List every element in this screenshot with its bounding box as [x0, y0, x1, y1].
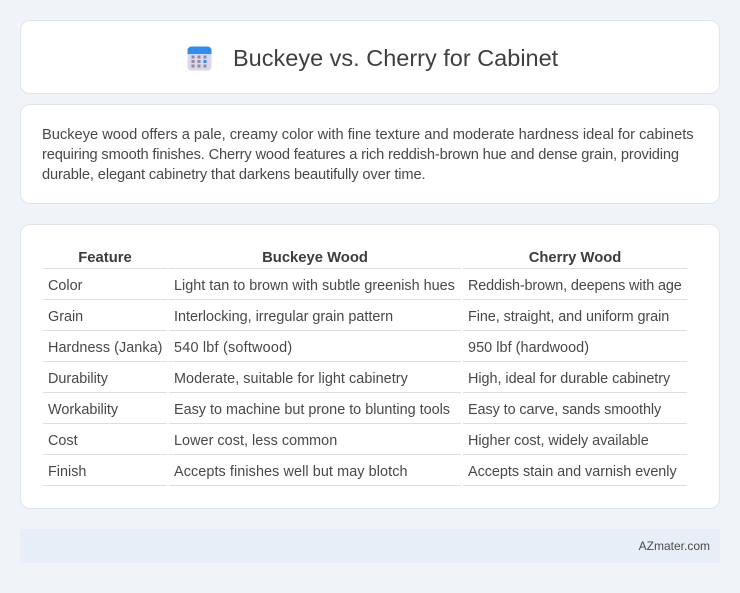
table header: Feature [78, 250, 132, 266]
row: finish: Accepts stain and varnish evenly [468, 464, 677, 480]
title: Buckeye vs. Cherry for Cabinet [233, 45, 558, 71]
row: color: Light tan to brown with subtle greenish hues [174, 278, 455, 294]
summary paragraph: Buckeye wood offers a pale, creamy color with fine texture and moderate hardness ideal for cabinets [42, 127, 694, 143]
row: hardness [43, 340, 687, 362]
row: finish: Accepts finishes well but may blotch [174, 464, 408, 480]
row: hardness: 540 lbf (softwood) [174, 340, 292, 356]
row: color [43, 278, 687, 300]
footer brand: AZmater.com [639, 539, 710, 553]
comparison table [43, 250, 687, 486]
table header: Cherry Wood [529, 250, 621, 266]
row: grain [43, 309, 687, 331]
row: finish [43, 464, 687, 486]
row: color: Color [48, 278, 82, 294]
panel: title card [20, 20, 720, 94]
summary paragraph: requiring smooth finishes. Cherry wood features a rich reddish-brown hue and dense grain, providing [42, 147, 679, 163]
row: durability: Durability [48, 371, 108, 387]
row: workability: Easy to machine but prone to blunting tools [174, 402, 450, 418]
summary paragraph [42, 127, 694, 183]
row: grain: Fine, straight, and uniform grain [468, 309, 669, 325]
table header [43, 250, 687, 269]
footer bar [20, 529, 720, 563]
summary paragraph: durable, elegant cabinetry that darkens beautifully over time. [42, 167, 425, 183]
table header: Buckeye Wood [262, 250, 368, 266]
row: hardness: Hardness (Janka) [48, 340, 163, 356]
row: durability: High, ideal for durable cabinetry [468, 371, 670, 387]
row: grain: Grain [48, 309, 83, 325]
row: workability: Workability [48, 402, 118, 418]
row: cost: Cost [48, 433, 78, 449]
row: durability [43, 371, 687, 393]
panel: summary text [20, 104, 720, 204]
row: color: Reddish-brown, deepens with age [468, 278, 682, 294]
row: cost: Lower cost, less common [174, 433, 337, 449]
panel: comparison table [20, 224, 720, 509]
row: finish: Finish [48, 464, 86, 480]
row: cost: Higher cost, widely available [468, 433, 649, 449]
icon: calendar [188, 46, 212, 70]
row: cost [43, 433, 687, 455]
row: workability: Easy to carve, sands smoothly [468, 402, 661, 418]
row: hardness: 950 lbf (hardwood) [468, 340, 589, 356]
row: workability [43, 402, 687, 424]
row: durability: Moderate, suitable for light cabinetry [174, 371, 408, 387]
row: grain: Interlocking, irregular grain pattern [174, 309, 393, 325]
